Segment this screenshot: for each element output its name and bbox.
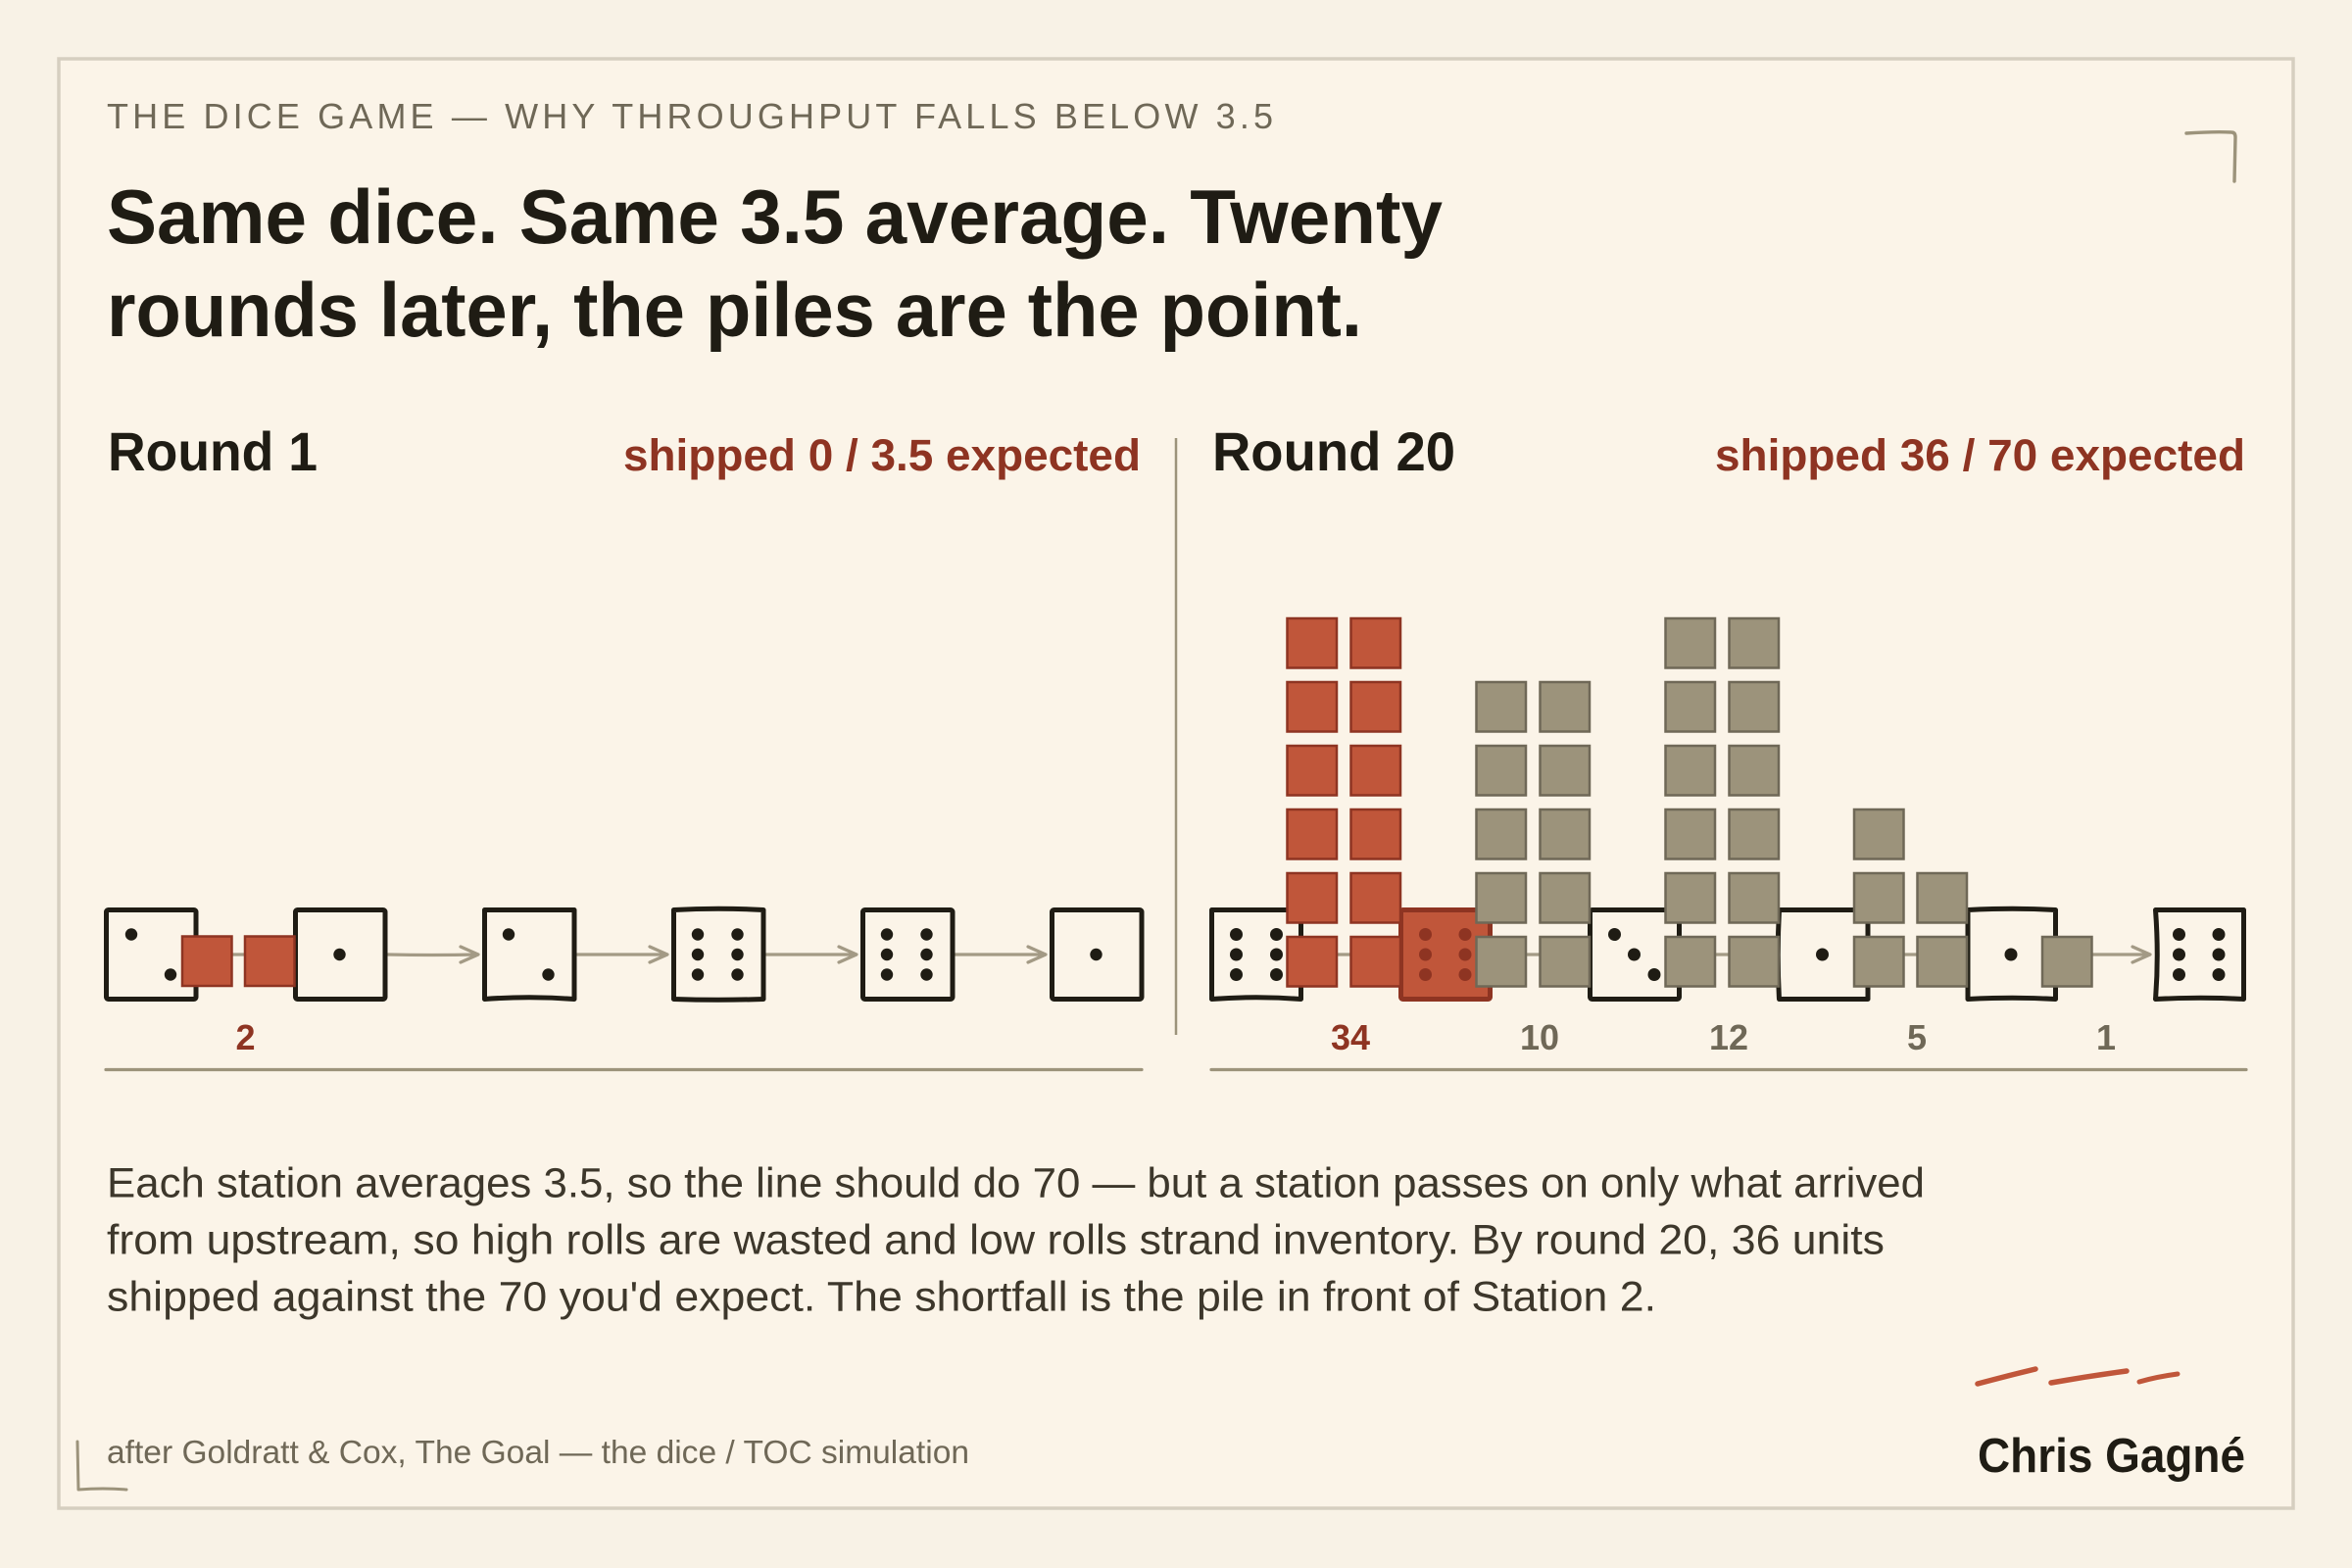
pile counts: 5 — [1907, 1017, 1927, 1057]
die: station 2 bottleneck shows 6 — [1401, 909, 1490, 1000]
shipped label: round 1: shipped 0 / 3.5 expected — [623, 430, 1141, 480]
die: station 5 shows 6 — [862, 909, 953, 1000]
explanation text: Each station averages 3.5, so the line should do 70 — but a station passes on only what arrived — [107, 1160, 1925, 1207]
pile counts — [1331, 1017, 2116, 1057]
divider between rounds — [1175, 438, 1177, 1035]
inventory pile: 34 units, in front of station 2 — [1288, 618, 1400, 986]
die: station 6 shows 1 — [1053, 909, 1142, 1000]
die: station 1 shows 2 — [106, 909, 196, 1000]
eyebrow: THE DICE GAME — WHY THROUGHPUT FALLS BELOW 3.5 — [107, 96, 1273, 136]
baseline rule: round 1 — [106, 1068, 1142, 1071]
explanation text — [107, 1160, 1925, 1321]
title: Same dice. Same 3.5 average. Twenty — [107, 173, 1443, 260]
panel: round 1 — [106, 420, 1142, 1070]
explanation text: shipped against the 70 you'd expect. The shortfall is the pile in front of Station 2. — [107, 1274, 1656, 1321]
pile counts: 12 — [1709, 1017, 1748, 1057]
pile counts: 34 — [1331, 1017, 1370, 1057]
die: station 3 shows 3 — [1590, 909, 1680, 1000]
corner mark: top right — [2186, 132, 2235, 181]
die: station 6 shows 6 — [2156, 909, 2244, 1000]
panel: round 20 — [1211, 420, 2246, 1070]
inventory pile: 5 units — [1854, 809, 1967, 986]
inventory pile: 12 units — [1666, 618, 1779, 986]
author name: Chris Gagné — [1978, 1430, 2245, 1483]
corner mark: bottom left — [77, 1442, 126, 1490]
baseline rule: round 20 — [1211, 1068, 2246, 1071]
flow arrows: round 20 — [1303, 947, 2150, 962]
title — [107, 173, 1443, 353]
inventory pile: 2 units — [182, 937, 294, 986]
explanation text: from upstream, so high rolls are wasted and low rolls strand inventory. By round 20, 36 units — [107, 1217, 1885, 1264]
die: station 4 shows 6 — [674, 908, 763, 1000]
heading: round 1: Round 1 — [108, 420, 318, 482]
die: station 1 shows 6 — [1211, 909, 1301, 1000]
die: station 3 shows 2 — [484, 909, 574, 1000]
source note: after Goldratt & Cox, The Goal — the dice / TOC simulation — [107, 1434, 969, 1470]
pile counts: 10 — [1520, 1017, 1559, 1057]
flow arrows: round 1 — [198, 947, 1046, 962]
die: station 2 shows 1 — [296, 909, 385, 1000]
die: station 5 shows 1 — [1968, 908, 2056, 1000]
shipped label: round 20: shipped 36 / 70 expected — [1715, 430, 2245, 480]
pile counts: 1 — [2096, 1017, 2116, 1057]
title: rounds later, the piles are the point. — [107, 267, 1362, 353]
die: station 4 shows 1 — [1778, 909, 1868, 1000]
author signature accent — [1978, 1369, 2178, 1384]
inventory pile: 1 unit — [2042, 937, 2091, 986]
pile count: 2: 2 — [235, 1017, 256, 1057]
heading: round 20: Round 20 — [1212, 420, 1455, 482]
inventory pile: 10 units — [1476, 682, 1590, 986]
